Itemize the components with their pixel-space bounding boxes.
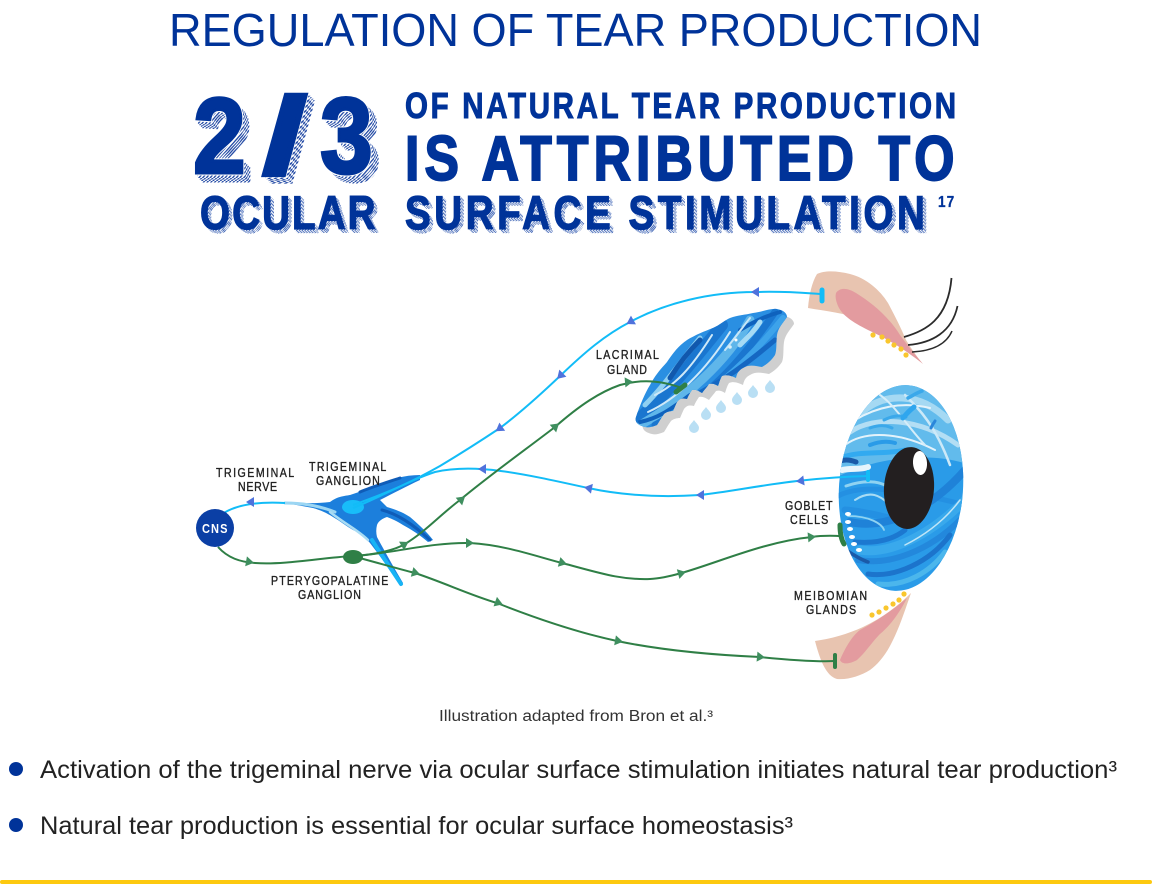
headline fraction 2/3: /	[270, 82, 314, 203]
labels: GLANDS	[806, 603, 856, 617]
goblet cell dots	[845, 512, 862, 552]
headline line: is attributed to: IS ATTRIBUTED TO	[405, 124, 954, 194]
headline fraction 2/3: 2	[197, 80, 250, 201]
upper eyelid	[808, 271, 958, 364]
headline fraction 2/3: 2	[193, 75, 246, 196]
headline fraction 2/3: 3	[325, 80, 378, 201]
headline fraction 2/3: /	[266, 78, 310, 199]
labels: CELLS	[790, 513, 828, 527]
eyelashes	[904, 278, 958, 352]
headline fraction 2/3: 3	[320, 75, 373, 196]
upper meibomian dots	[870, 332, 909, 358]
headline line: of natural tear production: OF NATURAL TEAR PRODUCTION	[405, 85, 956, 126]
labels: TRIGEMINAL	[309, 460, 387, 474]
headline fraction 2/3: /	[263, 75, 307, 196]
labels: NERVE	[238, 480, 277, 494]
arrowheads: autonomic	[245, 377, 816, 662]
headline fraction 2/3: 2	[198, 82, 251, 203]
headline line: ocular surface stimulation: SURFACE STIMULATION	[405, 187, 925, 240]
labels: PTERYGOPALATINE	[271, 574, 389, 588]
arrowheads: sensory	[246, 287, 805, 507]
headline reference 17: 17	[938, 194, 954, 211]
headline line: ocular surface stimulation: SURFACE STIMULATION	[408, 190, 927, 242]
headline line: ocular surface stimulation: OCULAR	[202, 189, 377, 241]
trigeminal nerve and ganglion	[280, 475, 433, 585]
pupil highlight	[912, 451, 928, 475]
headline line: ocular surface stimulation: OCULAR	[202, 190, 378, 242]
CNS node: CNS	[202, 521, 228, 536]
headline line: ocular surface stimulation: OCULAR	[200, 187, 375, 240]
headline fraction 2/3	[193, 75, 381, 204]
lower eyelid	[815, 591, 911, 679]
labels: GOBLET	[785, 499, 833, 513]
headline fraction 2/3: 3	[320, 75, 373, 196]
labels: GANGLION	[298, 588, 361, 602]
labels: LACRIMAL	[596, 348, 659, 362]
eye	[838, 385, 964, 591]
headline fraction 2/3: 3	[328, 83, 381, 204]
headline fraction 2/3: 2	[196, 79, 248, 200]
headline fraction 2/3: 2	[200, 83, 253, 204]
lacrimal gland	[630, 300, 794, 435]
pterygopalatine ganglion node	[343, 550, 363, 564]
autonomic pathways (green)	[218, 381, 840, 661]
pupil	[881, 445, 937, 531]
title: REGULATION OF TEAR PRODUCTION	[169, 4, 982, 56]
caption: Illustration adapted from Bron et al.³	[439, 708, 713, 725]
headline fraction 2/3: /	[268, 79, 311, 200]
sensory pathways (cyan)	[218, 292, 868, 517]
labels: TRIGEMINAL	[216, 466, 295, 480]
headline fraction 2/3: 3	[326, 82, 379, 203]
headline fraction 2/3: 3	[324, 79, 376, 200]
headline line: ocular surface stimulation: SURFACE STIMULATION	[408, 191, 928, 243]
headline fraction 2/3: /	[263, 75, 307, 196]
bullet 1: Activation of the trigeminal nerve via ocular surface stimulation initiates natural tear production³	[40, 756, 1117, 784]
headline line: ocular surface stimulation: SURFACE STIMULATION	[406, 189, 926, 241]
ganglion node	[342, 500, 364, 514]
headline line: ocular surface stimulation: OCULAR	[204, 191, 379, 243]
autonomic endpoints	[676, 385, 844, 667]
headline fraction 2/3: /	[269, 81, 313, 202]
labels	[216, 348, 867, 617]
labels: MEIBOMIAN	[794, 589, 867, 603]
headline: 2/3 of natural tear production is attributed to ocular surface stimulation	[193, 75, 956, 243]
lower meibomian dots	[869, 591, 907, 618]
footer rule	[0, 880, 1152, 884]
labels: GANGLION	[316, 474, 380, 488]
labels: GLAND	[607, 363, 647, 377]
headline fraction 2/3: 2	[193, 75, 246, 196]
bullet 2: Natural tear production is essential for ocular surface homeostasis³	[40, 812, 793, 840]
tear drops	[689, 380, 775, 433]
diagram: neural pathway of tear production	[196, 271, 970, 679]
sensory endpoints	[822, 290, 868, 480]
headline line: ocular surface stimulation	[200, 187, 928, 243]
CNS node	[196, 509, 234, 547]
